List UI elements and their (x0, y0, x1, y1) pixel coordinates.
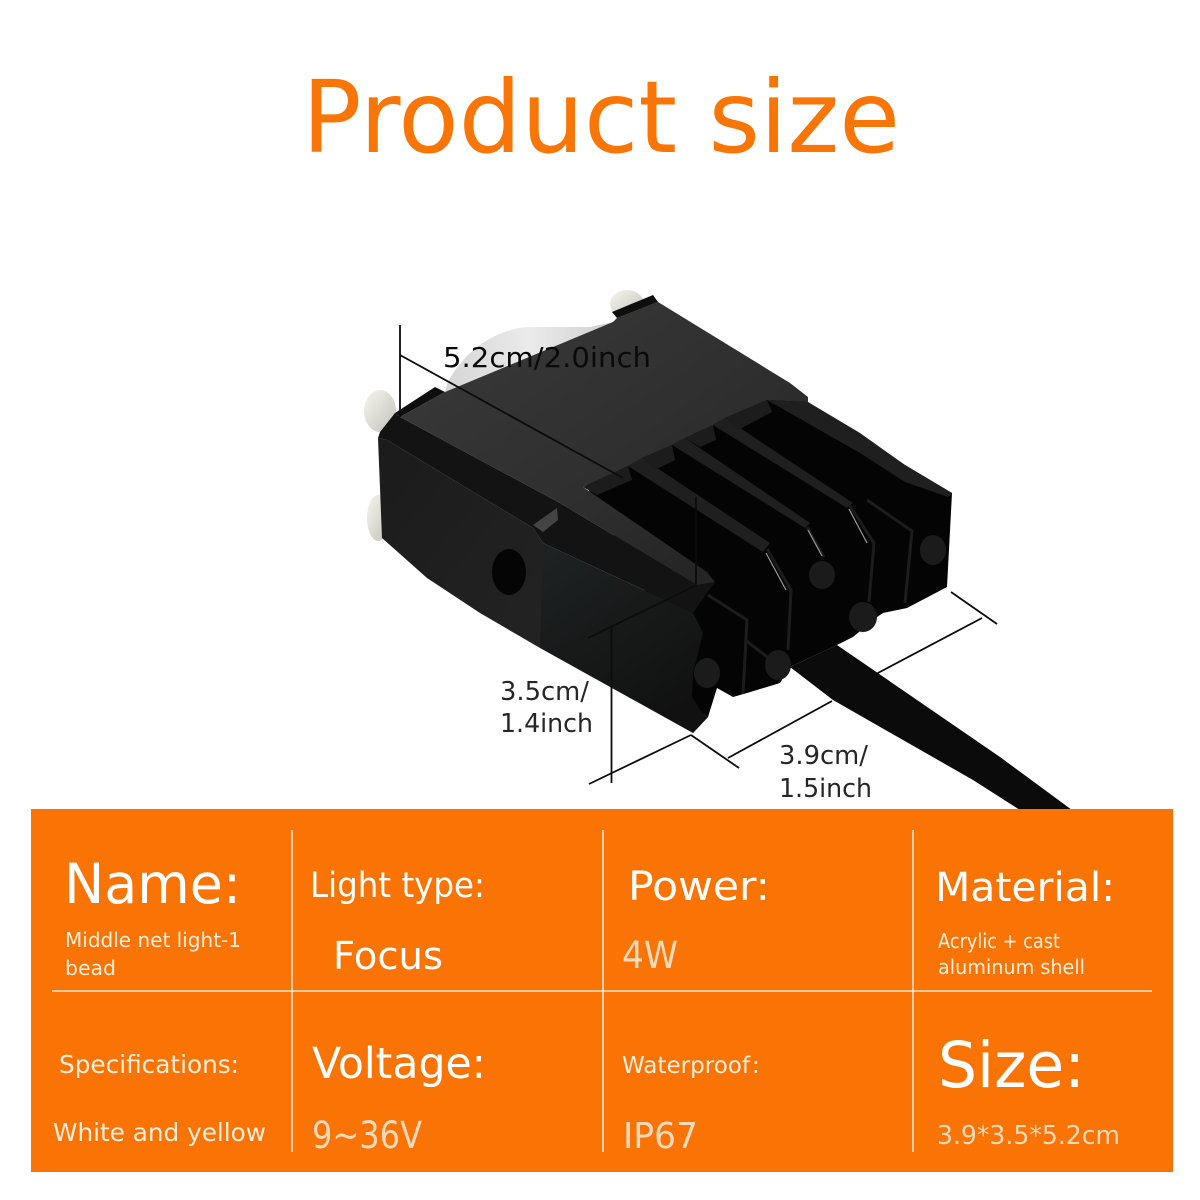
corner clip (533, 508, 558, 532)
body top face (400, 302, 808, 585)
product photo: LED light module with cable (364, 290, 1072, 810)
fin ribs (628, 400, 952, 552)
cell: light type: Light type: (310, 866, 485, 906)
cell: material: Material: (935, 865, 1115, 911)
cell: power: 4W (622, 934, 678, 977)
dimension lines (400, 325, 997, 784)
mounting hole (492, 549, 526, 595)
cell: specifications: White and yellow (53, 1118, 266, 1147)
cell: specifications (53, 1050, 266, 1147)
cell: voltage (312, 1039, 486, 1157)
corner tabs (395, 295, 658, 417)
lens (445, 322, 613, 392)
dimension label: height: 1.4inch (500, 709, 593, 739)
cell: size (937, 1029, 1120, 1151)
cell: material (935, 865, 1115, 979)
dimension label: width: 1.5inch (779, 774, 872, 804)
cable (790, 645, 1072, 810)
cell: voltage: Voltage: (312, 1039, 486, 1089)
dimension label: height (500, 677, 593, 739)
cell: specifications: Specifications: (59, 1050, 239, 1079)
cell: light type (310, 866, 485, 978)
body front face left (378, 438, 543, 648)
dimension label: width: 3.9cm/ (779, 741, 868, 771)
cell: power: Power: (628, 864, 770, 910)
cell: light type: Focus (333, 934, 443, 978)
cell: material: aluminum shell (938, 955, 1085, 979)
dimension label: width (779, 741, 872, 804)
cell: waterproof: IP67 (623, 1116, 698, 1157)
body front face right (540, 543, 708, 733)
cell: size: Size: (938, 1029, 1085, 1102)
cell: name: Middle net light-1 (65, 928, 241, 952)
cell: name (64, 852, 241, 980)
cell: name: Name: (64, 852, 241, 916)
mounting pins (364, 290, 644, 541)
heat sink fins (583, 395, 952, 733)
cell: size: 3.9*3.5*5.2cm (937, 1121, 1120, 1151)
cell: waterproof (622, 1053, 760, 1157)
cell: material: Acrylic + cast (938, 929, 1060, 953)
slot ends (583, 400, 772, 495)
title: Product size (302, 59, 900, 176)
cell: power (622, 864, 770, 977)
cell: waterproof: Waterproof (622, 1053, 751, 1079)
chamfer band (378, 413, 715, 613)
cell: voltage: 9~36V (312, 1114, 422, 1157)
dimension label: length: 5.2cm/2.0inch (443, 341, 651, 374)
panel: specification table (31, 809, 1173, 1172)
cell: waterproof: : (752, 1053, 760, 1079)
dimension label: height: 3.5cm/ (500, 677, 589, 707)
cell: name: bead (65, 956, 116, 980)
